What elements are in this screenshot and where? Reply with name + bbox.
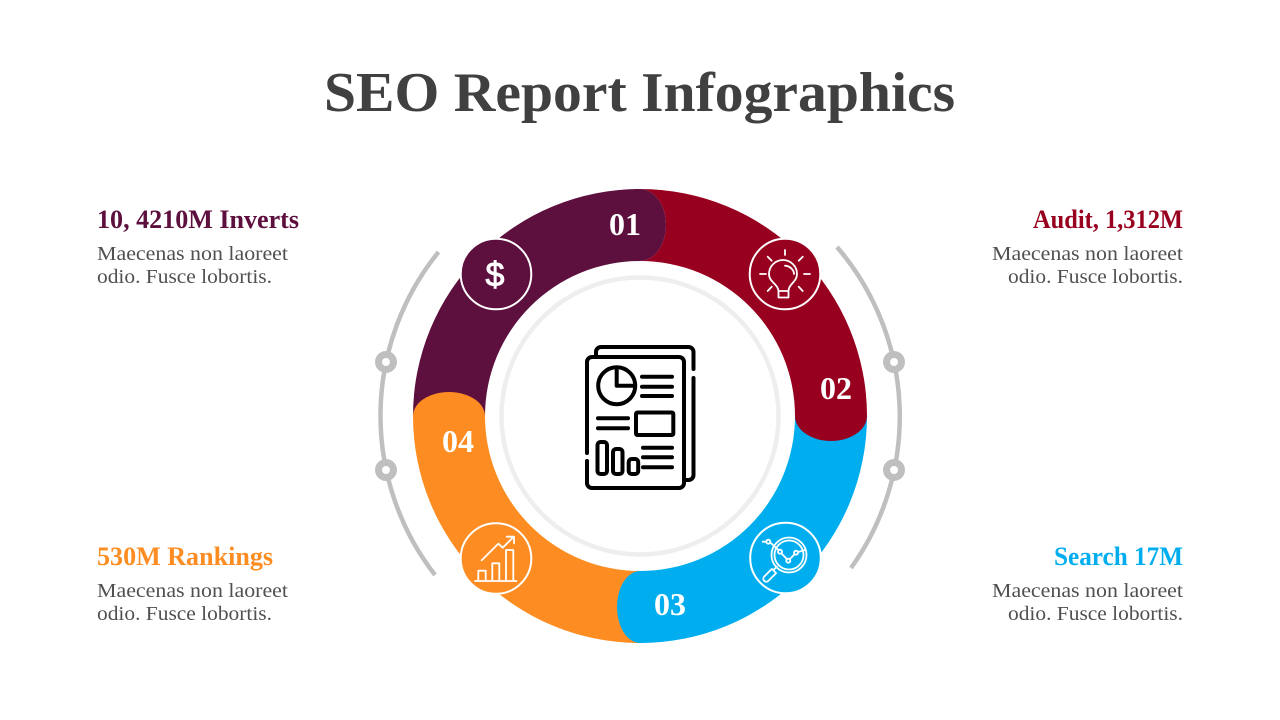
segment 03: blue bbox=[617, 416, 867, 643]
body: audit bbox=[992, 243, 1183, 288]
body: inverts: odio. Fusce lobortis. bbox=[97, 266, 272, 288]
arc 04 bbox=[413, 392, 640, 643]
segment 01: purple bbox=[413, 189, 666, 416]
heading: inverts: 10, 4210M Inverts bbox=[97, 205, 299, 234]
heading: rankings: 530M Rankings bbox=[97, 542, 273, 571]
segment 02: red bbox=[640, 189, 867, 441]
text block: Search 17M bbox=[992, 542, 1183, 625]
inner grey ring bbox=[502, 278, 778, 554]
icon: magnifier badge bbox=[750, 523, 821, 593]
body: inverts bbox=[97, 243, 288, 288]
arc 01 bbox=[413, 189, 666, 416]
number 01: 01 bbox=[609, 206, 641, 242]
title: SEO Report Infographics bbox=[324, 62, 955, 124]
number 04: 04 bbox=[442, 423, 474, 459]
number 02: 02 bbox=[820, 370, 852, 406]
left outer bracket arc bbox=[378, 252, 438, 575]
icon: light bulb badge bbox=[750, 239, 820, 309]
icon: dollar badge: $ bbox=[486, 256, 505, 294]
body: audit: odio. Fusce lobortis. bbox=[1008, 266, 1183, 288]
heading: search: Search 17M bbox=[1054, 542, 1183, 571]
body: rankings: Maecenas non laoreet bbox=[97, 580, 288, 602]
body: search: Maecenas non laoreet bbox=[992, 580, 1183, 602]
arc 03 bbox=[617, 416, 867, 643]
body: inverts: Maecenas non laoreet bbox=[97, 243, 288, 265]
icon: dollar badge bbox=[461, 239, 531, 309]
segment 04: orange bbox=[413, 392, 640, 643]
body: search bbox=[992, 580, 1183, 625]
text block: Audit, 1,312M bbox=[992, 205, 1183, 288]
icon: growth chart badge bbox=[461, 523, 531, 594]
icon: seo report document bbox=[587, 347, 694, 488]
number 03: 03 bbox=[654, 586, 686, 622]
body: rankings bbox=[97, 580, 288, 625]
text block: 530M Rankings bbox=[97, 542, 288, 625]
body: rankings: odio. Fusce lobortis. bbox=[97, 603, 272, 625]
body: search: odio. Fusce lobortis. bbox=[1008, 603, 1183, 625]
heading: audit: Audit, 1,312M bbox=[1033, 205, 1183, 234]
right outer bracket arc bbox=[837, 247, 902, 568]
body: audit: Maecenas non laoreet bbox=[992, 243, 1183, 265]
arc 02 bbox=[640, 189, 867, 441]
text block: 10, 4210M Inverts bbox=[97, 205, 299, 288]
